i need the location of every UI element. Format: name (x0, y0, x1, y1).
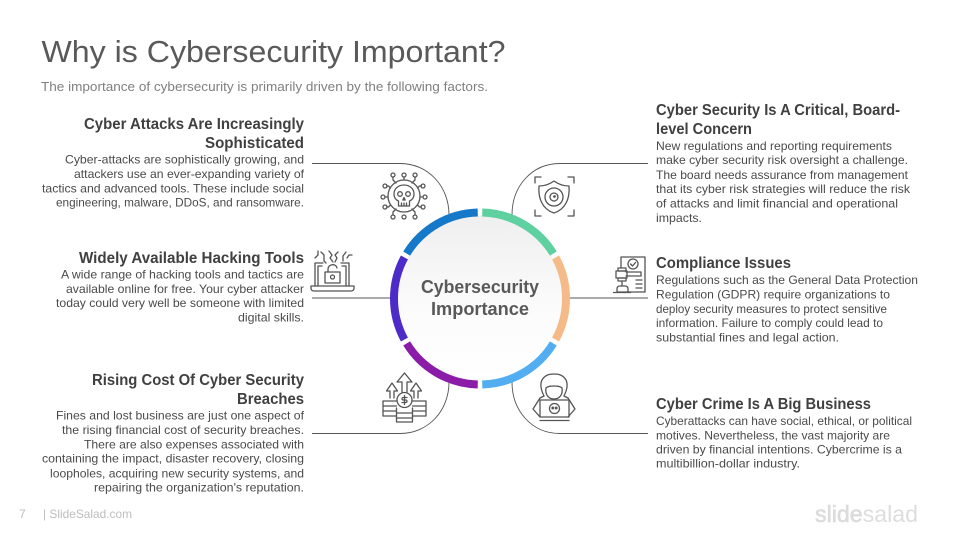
panel: compliance issues (656, 255, 918, 344)
panel: compliance issues: deploy security measures to protect sensitive (656, 302, 887, 316)
panel: cyber crime is a big business: motives. Nevertheless, the vast majority are (656, 428, 890, 442)
icon: money stacks with rising arrows (383, 373, 426, 422)
panel: cyber crime is a big business: driven by financial intentions. Cybercrime is a (656, 442, 902, 456)
panel: widely available hacking tools: A wide range of hacking tools and tactics are (61, 268, 304, 282)
panel: cyber crime is a big business: Cyberattacks can have social, ethical, or political (656, 414, 912, 428)
panel: compliance issues: Compliance Issues (656, 255, 791, 272)
panel: widely available hacking tools (56, 250, 304, 324)
panel: cyber attacks are increasingly sophisticated: Sophisticated (205, 135, 304, 152)
panel: cyber attacks are increasingly sophisticated: engineering, malware, DDoS, and ransomware. (56, 196, 304, 210)
panel: rising cost of cyber security breaches (42, 372, 305, 494)
panel: cyber security is a critical, board-level concern: The board needs assurance from management (656, 168, 909, 182)
panel: widely available hacking tools: available online for free. Your cyber attacker (66, 282, 304, 296)
connector lines (312, 164, 648, 434)
panel: cyber security is a critical, board-level concern: impacts. (656, 211, 702, 225)
central disc (397, 216, 563, 382)
panel: cyber security is a critical, board-level concern: New regulations and reporting requirements (656, 139, 892, 153)
panel: cyber security is a critical, board-level concern: make cyber security risk oversight a challenge. (656, 153, 908, 167)
center label: Cybersecurity (421, 276, 540, 297)
panel: compliance issues: substantial fines and legal action. (656, 330, 839, 344)
panel: cyber attacks are increasingly sophisticated (42, 116, 305, 210)
panel: widely available hacking tools: today could very well be someone with limited (56, 296, 304, 310)
icon: hooded hacker with laptop (533, 374, 575, 420)
subtitle: The importance of cybersecurity is primarily driven by the following factors. (41, 79, 488, 94)
logo wordmark: slidesalad (815, 501, 918, 527)
panel: cyber security is a critical, board-level concern: that its cyber risk strategies will reduce the risk (656, 182, 911, 196)
footer source: | SlideSalad.com (43, 507, 132, 521)
panel: cyber attacks are increasingly sophisticated: tactics and advanced tools. These include social (42, 182, 304, 196)
center label: Importance (431, 298, 529, 319)
panel: compliance issues: Regulations such as the General Data Protection (656, 273, 918, 287)
panel: compliance issues: Regulation (GDPR) require organizations to (656, 288, 890, 302)
panel: rising cost of cyber security breaches: There are also expenses associated with (84, 438, 304, 452)
panel: cyber security is a critical, board-level concern: of attacks and limit financial and operational (656, 196, 898, 210)
page number: 7 (19, 507, 26, 521)
panel: rising cost of cyber security breaches: loopholes, acquiring new security systems, and (50, 466, 304, 480)
center label (421, 276, 540, 319)
icon: legal document and gavel (614, 257, 645, 292)
panel: rising cost of cyber security breaches: Rising Cost Of Cyber Security (92, 372, 304, 389)
panel: cyber attacks are increasingly sophisticated: Cyber Attacks Are Increasingly (84, 116, 304, 133)
ring segments (394, 213, 566, 384)
panel: cyber security is a critical, board-level concern: level Concern (656, 121, 752, 138)
panel: cyber attacks are increasingly sophisticated: attackers use an ever-expanding variety of (74, 167, 305, 181)
icon: hacked laptop with open lock (311, 251, 354, 291)
panel: compliance issues: information. Failure to comply could lead to (656, 316, 883, 330)
panel: cyber security is a critical, board-level concern: Cyber Security Is A Critical, Board- (656, 102, 900, 119)
title: Why is Cybersecurity Important? (42, 34, 506, 69)
panel: rising cost of cyber security breaches: Breaches (237, 391, 304, 408)
panel: cyber security is a critical, board-level concern (656, 102, 911, 225)
panel: widely available hacking tools: digital skills. (238, 310, 304, 324)
panel: cyber crime is a big business: Cyber Crime Is A Big Business (656, 396, 871, 413)
panel: cyber crime is a big business: multibillion-dollar industry. (656, 456, 800, 470)
panel: rising cost of cyber security breaches: Fines and lost business are just one aspect of (56, 408, 305, 422)
panel: cyber crime is a big business (656, 396, 912, 470)
panel: cyber attacks are increasingly sophisticated: Cyber-attacks are sophistically growing, and (65, 152, 304, 166)
panel: rising cost of cyber security breaches: repairing the organization's reputation. (94, 480, 304, 494)
panel: rising cost of cyber security breaches: containing the impact, disaster recovery, closing (42, 452, 304, 466)
panel: widely available hacking tools: Widely Available Hacking Tools (79, 250, 304, 267)
panel: rising cost of cyber security breaches: the rising financial cost of security breaches. (62, 423, 304, 437)
icon: skull with circuit (381, 173, 427, 219)
icon: shield in scan frame (535, 177, 574, 216)
